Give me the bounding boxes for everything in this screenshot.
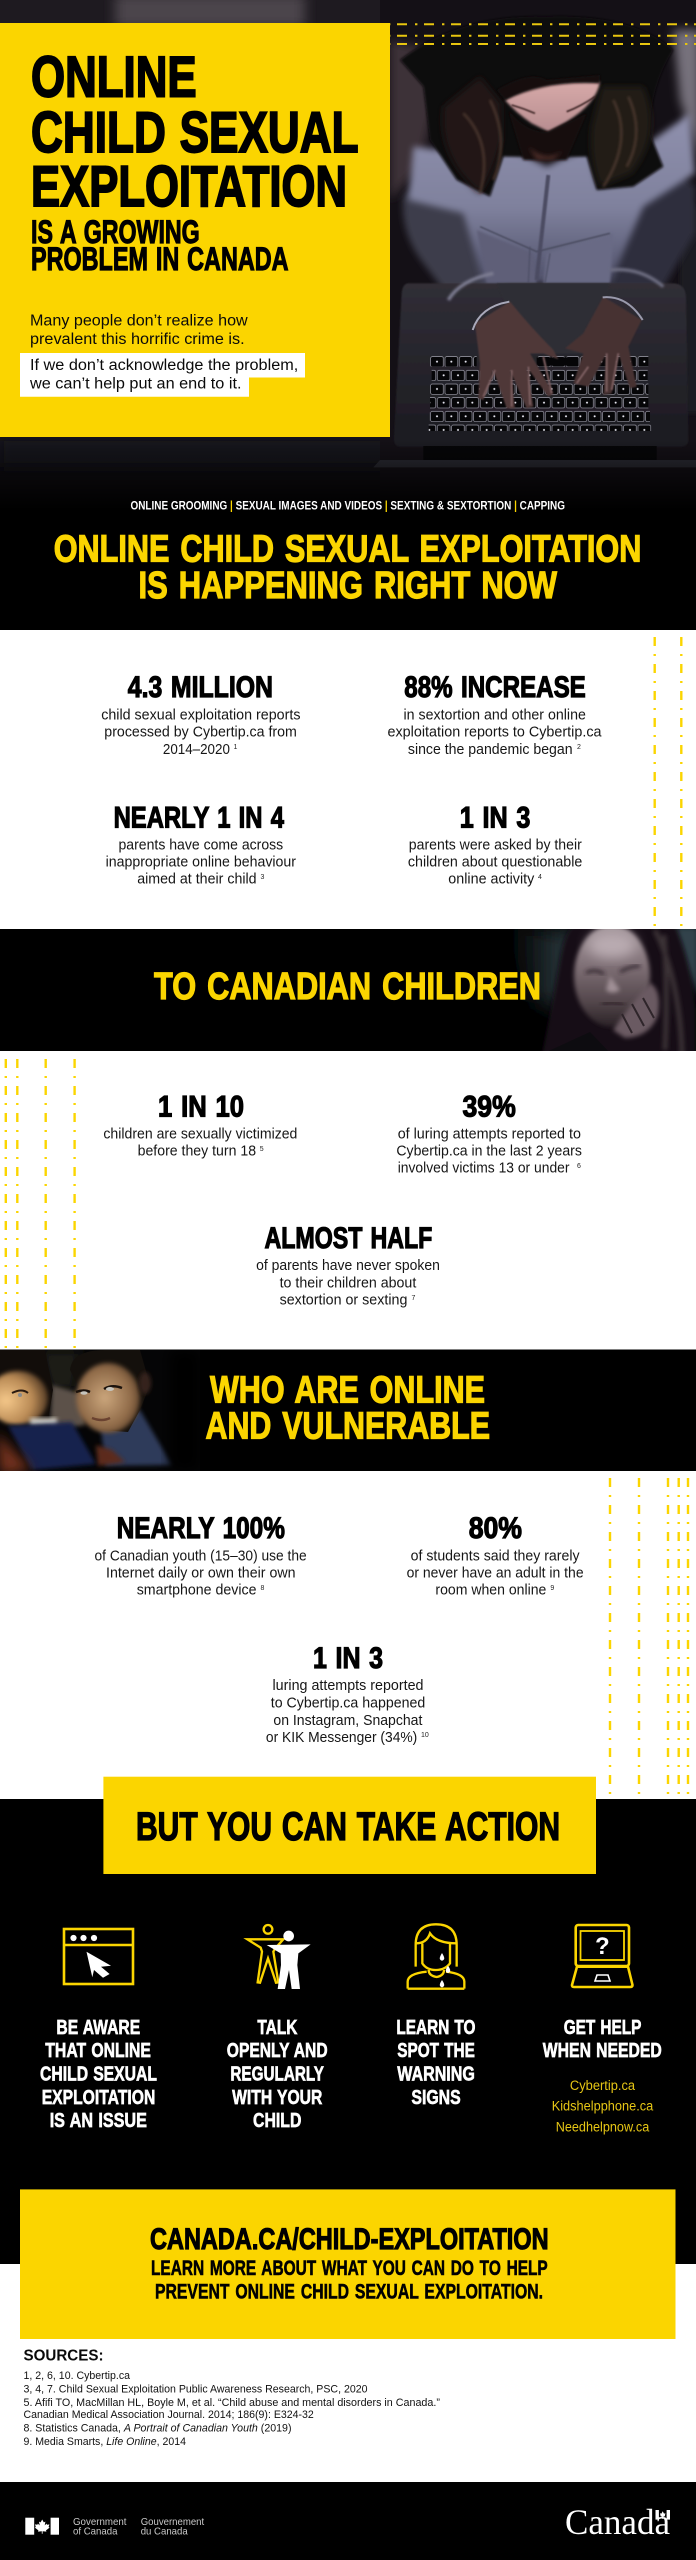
help links: Needhelpnow.ca (556, 2120, 650, 2135)
action: be aware: IS AN ISSUE (50, 2109, 147, 2132)
action: learn warning signs: SPOT THE (397, 2039, 475, 2062)
help links: Cybertip.ca (570, 2078, 636, 2093)
action: learn warning signs: SIGNS (411, 2086, 461, 2109)
icon: crying person (408, 1924, 464, 1989)
stat: 80%: or never have an adult in the (407, 1566, 584, 1582)
government of Canada signature: du Canada (141, 2525, 188, 2537)
hoodie (408, 113, 695, 283)
stat: 80%: 80% (469, 1512, 522, 1545)
keyboard (430, 355, 477, 367)
action: be aware: THAT ONLINE (45, 2039, 151, 2062)
stat: 1 in 3 luring: or KIK Messenger (34%) (266, 1730, 417, 1746)
icon: laptop with question mark (572, 1925, 632, 1987)
title: CHILD SEXUAL (31, 101, 359, 165)
government of Canada signature (25, 2516, 204, 2537)
stat: 80%: 9 (550, 1585, 554, 1592)
stat: almost half (256, 1222, 440, 1308)
icon: Canada flag (25, 2518, 59, 2535)
icon: two people talking (247, 1925, 311, 1989)
stat: nearly 100%: 8 (260, 1585, 264, 1592)
action: learn warning signs: WARNING (397, 2062, 475, 2086)
heading: WHO ARE ONLINE (210, 1369, 485, 1411)
stat: almost half: of parents have never spoken (256, 1258, 440, 1274)
stat: 88% increase: in sextortion and other online (404, 708, 586, 724)
action: talk openly: TALK (257, 2016, 298, 2039)
panel: call to action: LEARN MORE ABOUT WHAT YOU CAN DO TO HELP (151, 2257, 548, 2280)
government of Canada signature: Gouvernement (141, 2516, 204, 2528)
stat: almost half: sextortion or sexting (280, 1292, 407, 1308)
stat: 39%: of luring attempts reported to (398, 1126, 581, 1142)
stat: 80% (407, 1512, 584, 1599)
stat: 88% increase: exploitation reports to Cybertip.ca (388, 725, 602, 741)
action: be aware: CHILD SEXUAL (40, 2062, 157, 2086)
title: ONLINE (31, 46, 197, 110)
sources: Canadian Medical Association Journal. 2014; 186(9): E324-32 (24, 2409, 314, 2421)
stat: 39%: involved victims 13 or under (398, 1161, 570, 1177)
Canada wordmark: Canada (565, 2502, 670, 2542)
heading: AND VULNERABLE (206, 1405, 490, 1447)
stat: nearly 100% (94, 1512, 307, 1599)
sources: 9. Media Smarts, Life Online, 2014 (24, 2436, 186, 2448)
stat: 1 in 3 luring (266, 1642, 429, 1746)
stat: nearly 100%: smartphone device (137, 1583, 256, 1599)
stat: 80%: of students said they rarely (411, 1548, 580, 1564)
stat: 1 in 10: children are sexually victimized (103, 1126, 297, 1142)
action: talk openly (227, 2016, 328, 2132)
stat: 1 in 3 luring: 1 IN 3 (313, 1642, 383, 1675)
stat: 39%: Cybertip.ca in the last 2 years (396, 1144, 582, 1160)
stat: nearly 100%: of Canadian youth (15–30) use the (94, 1548, 307, 1564)
decorative dashes section one (655, 630, 681, 929)
government of Canada signature: of Canada (73, 2525, 118, 2537)
help links (552, 2078, 654, 2135)
action: talk openly: CHILD (253, 2109, 301, 2132)
face (505, 81, 600, 132)
stat: 4.3 million: child sexual exploitation reports (101, 708, 300, 724)
action: talk openly: OPENLY AND (227, 2039, 328, 2062)
photo: girl looking at a screen (514, 929, 696, 1051)
action: be aware: BE AWARE (56, 2016, 140, 2039)
stat: 1 in 3 parents: online activity (448, 872, 535, 888)
stat: 1 in 10 (103, 1090, 297, 1160)
stat: 1 in 3 luring: on Instagram, Snapchat (273, 1713, 422, 1729)
action: talk openly: WITH YOUR (232, 2086, 322, 2109)
action: talk openly: REGULARLY (230, 2062, 324, 2086)
panel: call to action (20, 2189, 676, 2339)
topic list: ONLINE GROOMING | SEXUAL IMAGES AND VIDEOS | SEXTING & SEXTORTION | CAPPING (130, 498, 565, 512)
photo: two boys looking at a tablet (0, 1350, 172, 1471)
stat: nearly 100%: Internet daily or own their own (106, 1566, 296, 1582)
icon: laptop with question mark: ? (595, 1933, 610, 1960)
stat: 1 in 10: 1 IN 10 (158, 1090, 244, 1123)
subtitle (31, 213, 288, 277)
black band behind hero heading (0, 437, 696, 630)
stat: 1 in 3 luring: luring attempts reported (272, 1678, 424, 1694)
stat: 1 in 3 parents: children about questionable (408, 854, 582, 870)
banner: but you can take action: BUT YOU CAN TAKE ACTION (136, 1805, 560, 1849)
heading (206, 1369, 490, 1447)
intro text (30, 313, 249, 348)
stat: 1 in 3 luring: 10 (421, 1732, 429, 1739)
stat: 39% (396, 1090, 582, 1177)
stat: 4.3 million: 4.3 MILLION (128, 671, 273, 704)
laptop lid (394, 283, 688, 447)
stat: 1 in 10: 5 (260, 1146, 264, 1153)
action: be aware: EXPLOITATION (42, 2086, 155, 2109)
footer (0, 2482, 696, 2560)
stat: 88% increase: since the pandemic began (408, 742, 573, 758)
stat: 39%: 6 (577, 1163, 581, 1170)
highlighted call to acknowledge: If we don’t acknowledge the problem, (30, 357, 298, 374)
stat: 88% increase (388, 671, 602, 758)
panel: call to action: CANADA.CA/CHILD-EXPLOITATION (150, 2223, 549, 2256)
decorative dashes section three (610, 1478, 688, 1799)
stat: nearly 1 in 4: parents have come across (118, 837, 283, 853)
stat: almost half: to their children about (280, 1275, 416, 1291)
stat: 1 in 3 parents: 1 IN 3 (460, 801, 530, 834)
panel: take action black background (0, 1799, 696, 2264)
icon: browser window with cursor (64, 1929, 133, 1984)
highlighted call to acknowledge (20, 353, 305, 397)
stat: 88% increase: 88% INCREASE (404, 671, 586, 704)
subtitle: IS A GROWING (31, 213, 200, 250)
stat: nearly 1 in 4: 3 (260, 874, 264, 881)
stat: 1 in 3 parents: parents were asked by their (409, 837, 582, 853)
subtitle: PROBLEM IN CANADA (31, 240, 288, 277)
action: be aware (40, 2016, 157, 2132)
stat: 4.3 million: processed by Cybertip.ca from (104, 725, 297, 741)
action: get help: GET HELP (564, 2016, 641, 2039)
stat: 4.3 million (101, 671, 300, 758)
stat: 1 in 10: before they turn 18 (138, 1144, 256, 1160)
action: get help: WHEN NEEDED (543, 2039, 662, 2062)
title (31, 46, 359, 219)
stat: 4.3 million: 2014–2020 (163, 742, 230, 758)
stat: 1 in 3 parents (408, 801, 582, 888)
stat: nearly 1 in 4: NEARLY 1 IN 4 (114, 801, 284, 834)
sleeves (400, 189, 488, 284)
action: learn warning signs: LEARN TO (396, 2016, 475, 2039)
stat: nearly 1 in 4: inappropriate online behaviour (106, 854, 296, 870)
hero photo: girl typing on a laptop in the dark (0, 0, 696, 510)
sources: SOURCES: (24, 2348, 104, 2365)
action: get help (543, 2016, 662, 2135)
banner: but you can take action (103, 1777, 596, 1874)
hands (475, 302, 558, 408)
action: learn warning signs (396, 2016, 475, 2109)
heading: happening right now: IS HAPPENING RIGHT NOW (138, 565, 557, 607)
stat: 1 in 3 luring: to Cybertip.ca happened (271, 1695, 425, 1711)
decorative dashes section two (6, 1051, 75, 1349)
panel: hero title block (0, 23, 390, 437)
heading: happening right now (54, 529, 641, 607)
sources (24, 2348, 440, 2448)
stat: nearly 1 in 4 (106, 801, 296, 888)
government of Canada signature: Government (73, 2516, 127, 2528)
intro text: Many people don’t realize how (30, 313, 249, 330)
band: to Canadian children (0, 925, 696, 1055)
stat: almost half: ALMOST HALF (264, 1222, 432, 1255)
stat: 4.3 million: 1 (234, 744, 238, 751)
sources: 8. Statistics Canada, A Portrait of Canadian Youth (2019) (24, 2423, 292, 2435)
sources: 5. Afifi TO, MacMillan HL, Boyle M, et al. “Child abuse and mental disorders in Canada.” (24, 2397, 440, 2409)
sources: 3, 4, 7. Child Sexual Exploitation Public Awareness Research, PSC, 2020 (24, 2383, 368, 2395)
heading: TO CANADIAN CHILDREN (154, 966, 541, 1008)
stat: 1 in 3 parents: 4 (538, 874, 542, 881)
intro text: prevalent this horrific crime is. (30, 331, 245, 348)
highlighted call to acknowledge: we can’t help put an end to it. (29, 376, 242, 393)
help links: Kidshelpphone.ca (552, 2099, 654, 2114)
stat: 88% increase: 2 (577, 744, 581, 751)
sources: 1, 2, 6, 10. Cybertip.ca (24, 2370, 131, 2382)
hair and hood (400, 16, 673, 197)
stat: 80%: room when online (435, 1583, 546, 1599)
stat: 39%: 39% (462, 1090, 516, 1123)
decorative yellow dash rows (388, 24, 696, 44)
stat: nearly 1 in 4: aimed at their child (137, 872, 257, 888)
band: who are online and vulnerable (0, 1350, 696, 1475)
title: EXPLOITATION (31, 155, 347, 219)
stat: almost half: 7 (412, 1295, 416, 1302)
stat: nearly 100%: NEARLY 100% (117, 1512, 285, 1545)
panel: call to action: PREVENT ONLINE CHILD SEXUAL EXPLOITATION. (155, 2280, 543, 2303)
